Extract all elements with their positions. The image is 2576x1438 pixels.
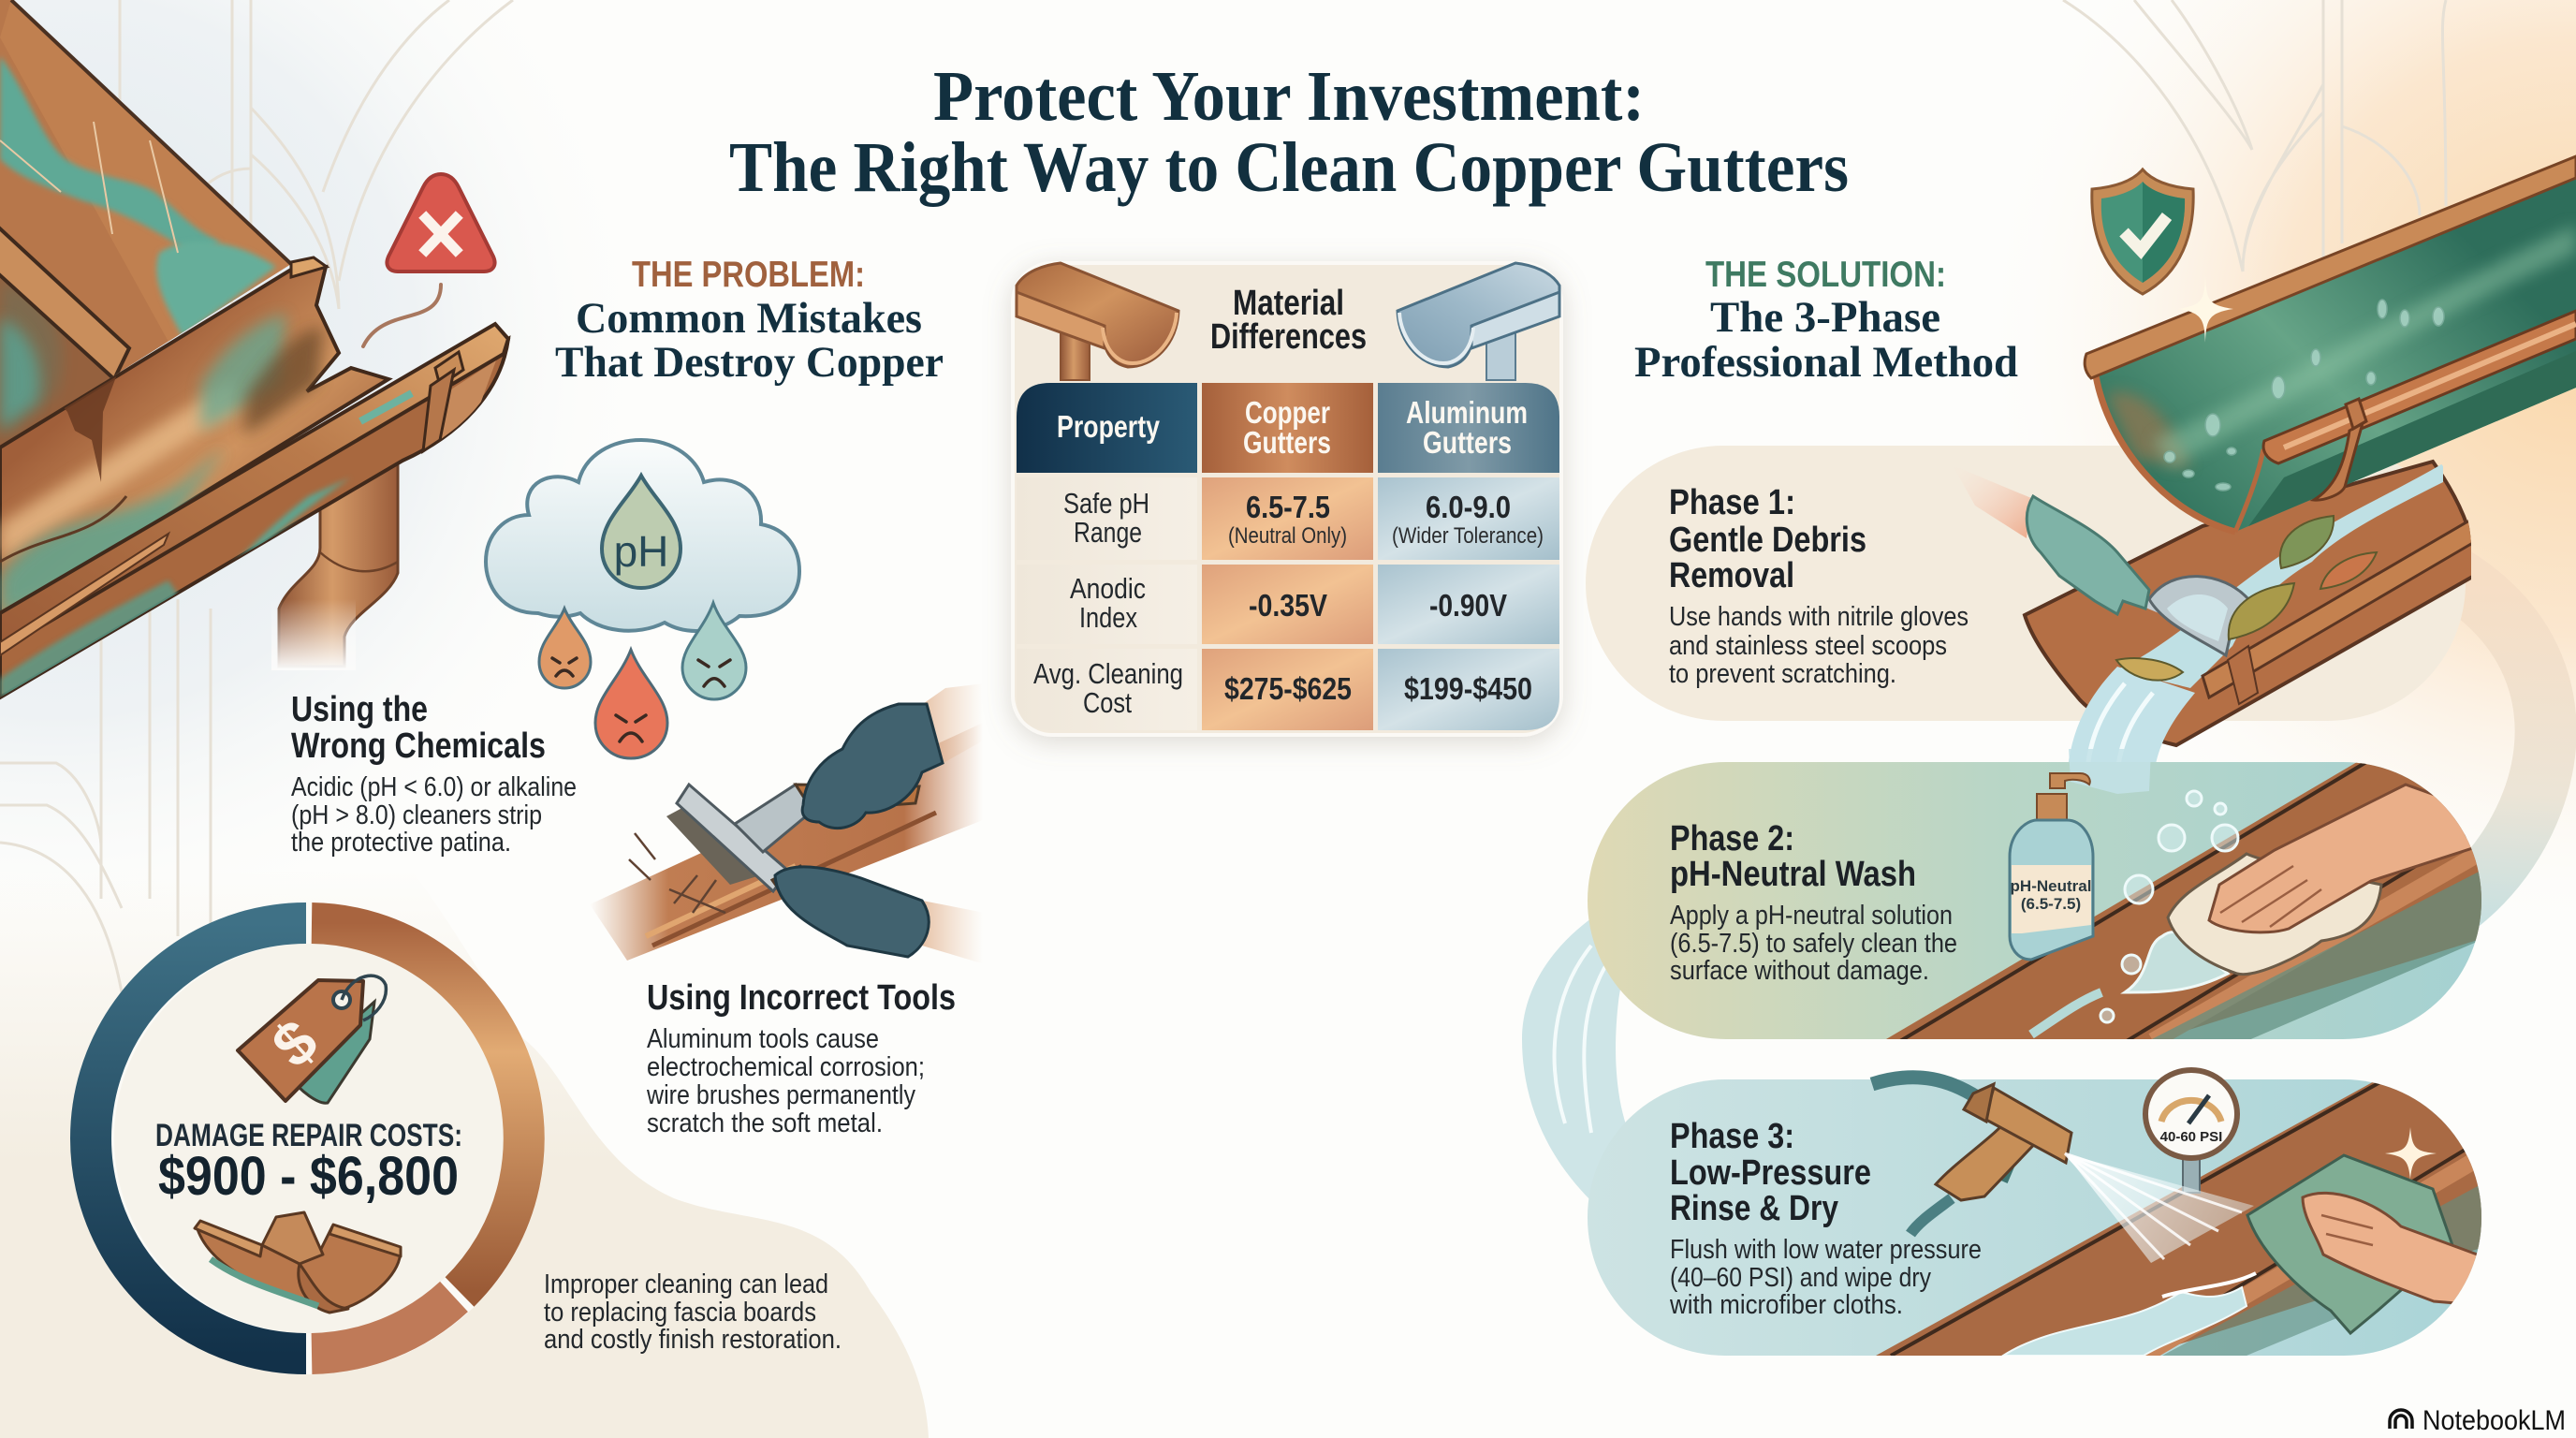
text: improper cleaning note: to replacing fascia boards <box>544 1298 816 1328</box>
arm <box>1953 465 2031 538</box>
ring value: $900 - $6,800 <box>158 1146 459 1207</box>
text: improper cleaning note: and costly finish restoration. <box>544 1325 842 1355</box>
heading: the problem: THE PROBLEM: <box>632 255 865 295</box>
row: safe pH range: Range <box>1074 516 1142 549</box>
phase 1 text: to prevent scratching. <box>1669 659 1896 689</box>
icon: pH-neutral bottle <box>2010 773 2093 960</box>
illustration: wire brush scratching copper <box>590 683 985 964</box>
icon: pressure gauge <box>2145 1070 2237 1193</box>
text: using incorrect tools <box>646 978 956 1138</box>
phase 3 text: (40–60 PSI) and wipe dry <box>1670 1263 1931 1293</box>
row: safe pH range: 6.5-7.5 <box>1246 490 1330 524</box>
row: safe pH range: (Wider Tolerance) <box>1392 523 1544 549</box>
table header row: Property <box>1057 409 1161 444</box>
heading: the solution: Professional Method <box>1634 338 2018 387</box>
icon: aluminum gutter <box>1398 263 1559 380</box>
phase 3 text: Rinse & Dry <box>1670 1189 1838 1228</box>
phase 2 text: Apply a pH-neutral solution <box>1670 901 1953 931</box>
title <box>729 57 1849 207</box>
icon: pH cloud with angry drops <box>486 440 799 758</box>
phase 1 text: Gentle Debris <box>1669 521 1866 560</box>
row: safe pH range: 6.0-9.0 <box>1426 490 1511 524</box>
row: anodic index <box>1017 565 1559 644</box>
text: using the wrong chemicals: the protective patina. <box>291 828 511 858</box>
text: using incorrect tools: wire brushes permanently <box>646 1080 915 1110</box>
row: average cleaning cost: Cost <box>1083 686 1132 719</box>
phase 3 text: Phase 3: <box>1670 1117 1794 1156</box>
waterfall entry <box>2069 749 2151 794</box>
hand <box>2209 785 2490 932</box>
copper beam <box>590 723 983 961</box>
text: using incorrect tools: Using Incorrect Tools <box>647 978 956 1018</box>
text: using the wrong chemicals: Wrong Chemicals <box>291 726 546 766</box>
water spray <box>2065 1153 2256 1297</box>
icon: pH-neutral bottle: pH-Neutral <box>2011 877 2091 895</box>
front rim <box>2263 311 2576 463</box>
row: average cleaning cost <box>1017 649 1559 730</box>
panel: material differences table <box>1013 263 1561 735</box>
heading: the problem: That Destroy Copper <box>555 338 944 387</box>
text: using the wrong chemicals: (pH > 8.0) cleaners strip <box>291 800 542 830</box>
chart: damage repair cost ring <box>73 902 545 1374</box>
hand <box>2303 1193 2490 1306</box>
foam puddle <box>2125 932 2228 992</box>
icon: hose and nozzle <box>1872 1078 2071 1234</box>
icon: warning triangle <box>387 174 495 271</box>
phase 2 text: surface without damage. <box>1670 956 1929 986</box>
row: anodic index: Index <box>1079 601 1137 634</box>
green cloth <box>2247 1155 2452 1333</box>
title: Protect Your Investment: <box>933 57 1645 136</box>
illustration: damaged copper roof and gutter <box>0 0 508 697</box>
table header row: Gutters <box>1243 425 1331 460</box>
phase 3 text: with microfiber cloths. <box>1669 1290 1903 1320</box>
water swoosh: right connector <box>2406 571 2546 936</box>
waterfall <box>2067 667 2195 791</box>
text: using incorrect tools: electrochemical corrosion; <box>647 1052 925 1082</box>
icon: pH cloud with angry drops: pH <box>614 527 668 576</box>
row: average cleaning cost: $275-$625 <box>1224 671 1352 706</box>
heading: the problem <box>555 255 944 387</box>
text: improper cleaning note <box>544 1269 842 1355</box>
text: improper cleaning note: Improper cleaning can lead <box>544 1269 828 1299</box>
bubbles <box>2100 791 2238 1022</box>
panel: phase 1 <box>1586 446 2476 791</box>
phase 1 text <box>1669 483 1969 689</box>
icon: shield with check <box>2092 169 2193 294</box>
table header row: Aluminum <box>1406 395 1528 430</box>
phase 3 text <box>1669 1117 1982 1320</box>
arrow: squiggle to damage <box>363 285 441 346</box>
gutter outer face <box>0 339 508 697</box>
forearms <box>899 683 985 772</box>
phase 3 text: Low-Pressure <box>1670 1153 1871 1193</box>
phase 1 text: and stainless steel scoops <box>1669 631 1947 661</box>
row: safe pH range <box>1017 477 1559 560</box>
top glove <box>802 704 943 829</box>
sparkle <box>2385 1127 2437 1180</box>
copper gutter <box>1876 1079 2490 1356</box>
phase 2 text: (6.5-7.5) to safely clean the <box>1670 929 1957 959</box>
icon: pressure gauge: 40-60 PSI <box>2160 1129 2222 1145</box>
table header row <box>1017 383 1559 473</box>
water droplets <box>2164 300 2444 491</box>
row: average cleaning cost: Avg. Cleaning <box>1033 657 1183 690</box>
icon: price tag <box>238 976 386 1103</box>
phase 1 text: Removal <box>1669 556 1794 595</box>
icon: price tag: $ <box>258 1006 330 1080</box>
phase 2 text: pH-Neutral Wash <box>1670 855 1916 894</box>
top rim <box>2085 156 2576 378</box>
roof panel <box>0 0 291 448</box>
text: using incorrect tools: Aluminum tools cause <box>647 1024 879 1054</box>
gutter front rim <box>0 324 508 655</box>
panel: phase 3 <box>1588 1070 2490 1356</box>
heading: the solution: The 3-Phase <box>1710 293 1940 342</box>
table heading <box>1210 284 1367 357</box>
row: anodic index: -0.90V <box>1429 588 1507 623</box>
table heading: Material <box>1233 284 1344 323</box>
icon: pH-neutral bottle: (6.5-7.5) <box>2021 895 2081 913</box>
panel: phase 2 <box>1588 749 2490 1041</box>
table header row: Copper <box>1245 395 1330 430</box>
bottom glove <box>775 867 929 957</box>
icon: broken gutter <box>195 1212 401 1313</box>
rim strap <box>2314 399 2366 500</box>
phase 2 text: Phase 2: <box>1670 819 1794 858</box>
phase 1 text: Phase 1: <box>1669 483 1795 522</box>
illustration: clean patina gutter <box>2085 156 2576 532</box>
phase 2 text <box>1670 819 1957 986</box>
copper gutter <box>1886 762 2490 1041</box>
scratch marks <box>629 833 725 913</box>
icon: copper gutter <box>1017 263 1178 380</box>
water swoosh: left connector <box>1522 875 1685 1236</box>
row: safe pH range: Safe pH <box>1063 487 1149 520</box>
row: average cleaning cost: $199-$450 <box>1404 671 1532 706</box>
ring label: DAMAGE REPAIR COSTS: <box>155 1118 462 1153</box>
leaves <box>2116 516 2377 681</box>
phase 1 text: Use hands with nitrile gloves <box>1669 602 1969 632</box>
heading: the problem: Common Mistakes <box>576 294 922 343</box>
row: safe pH range: (Neutral Only) <box>1228 523 1347 549</box>
row: anodic index: Anodic <box>1070 572 1146 605</box>
sparkle <box>2178 275 2233 343</box>
heading: the solution <box>1634 255 2018 387</box>
heading: the solution: THE SOLUTION: <box>1705 255 1946 295</box>
brush <box>666 785 919 906</box>
table heading: Differences <box>1210 317 1367 357</box>
scoop <box>2106 577 2256 655</box>
downspout <box>271 449 398 670</box>
text: using the wrong chemicals <box>291 690 577 858</box>
text: using the wrong chemicals: Using the <box>291 690 428 729</box>
illustration: copper gutter with water and debris <box>2025 462 2476 745</box>
row: anodic index: -0.35V <box>1249 588 1327 623</box>
gutter back wall with torn hole <box>0 257 388 618</box>
glove <box>2027 496 2149 614</box>
water on gutter <box>2003 1287 2247 1356</box>
phase 3 text: Flush with low water pressure <box>1670 1235 1982 1265</box>
text: using the wrong chemicals: Acidic (pH < 6.0) or alkaline <box>291 772 577 802</box>
title: The Right Way to Clean Copper Gutters <box>729 128 1849 207</box>
table header row: Gutters <box>1423 425 1512 460</box>
cloth <box>2168 854 2381 975</box>
text: using incorrect tools: scratch the soft metal. <box>647 1108 883 1138</box>
